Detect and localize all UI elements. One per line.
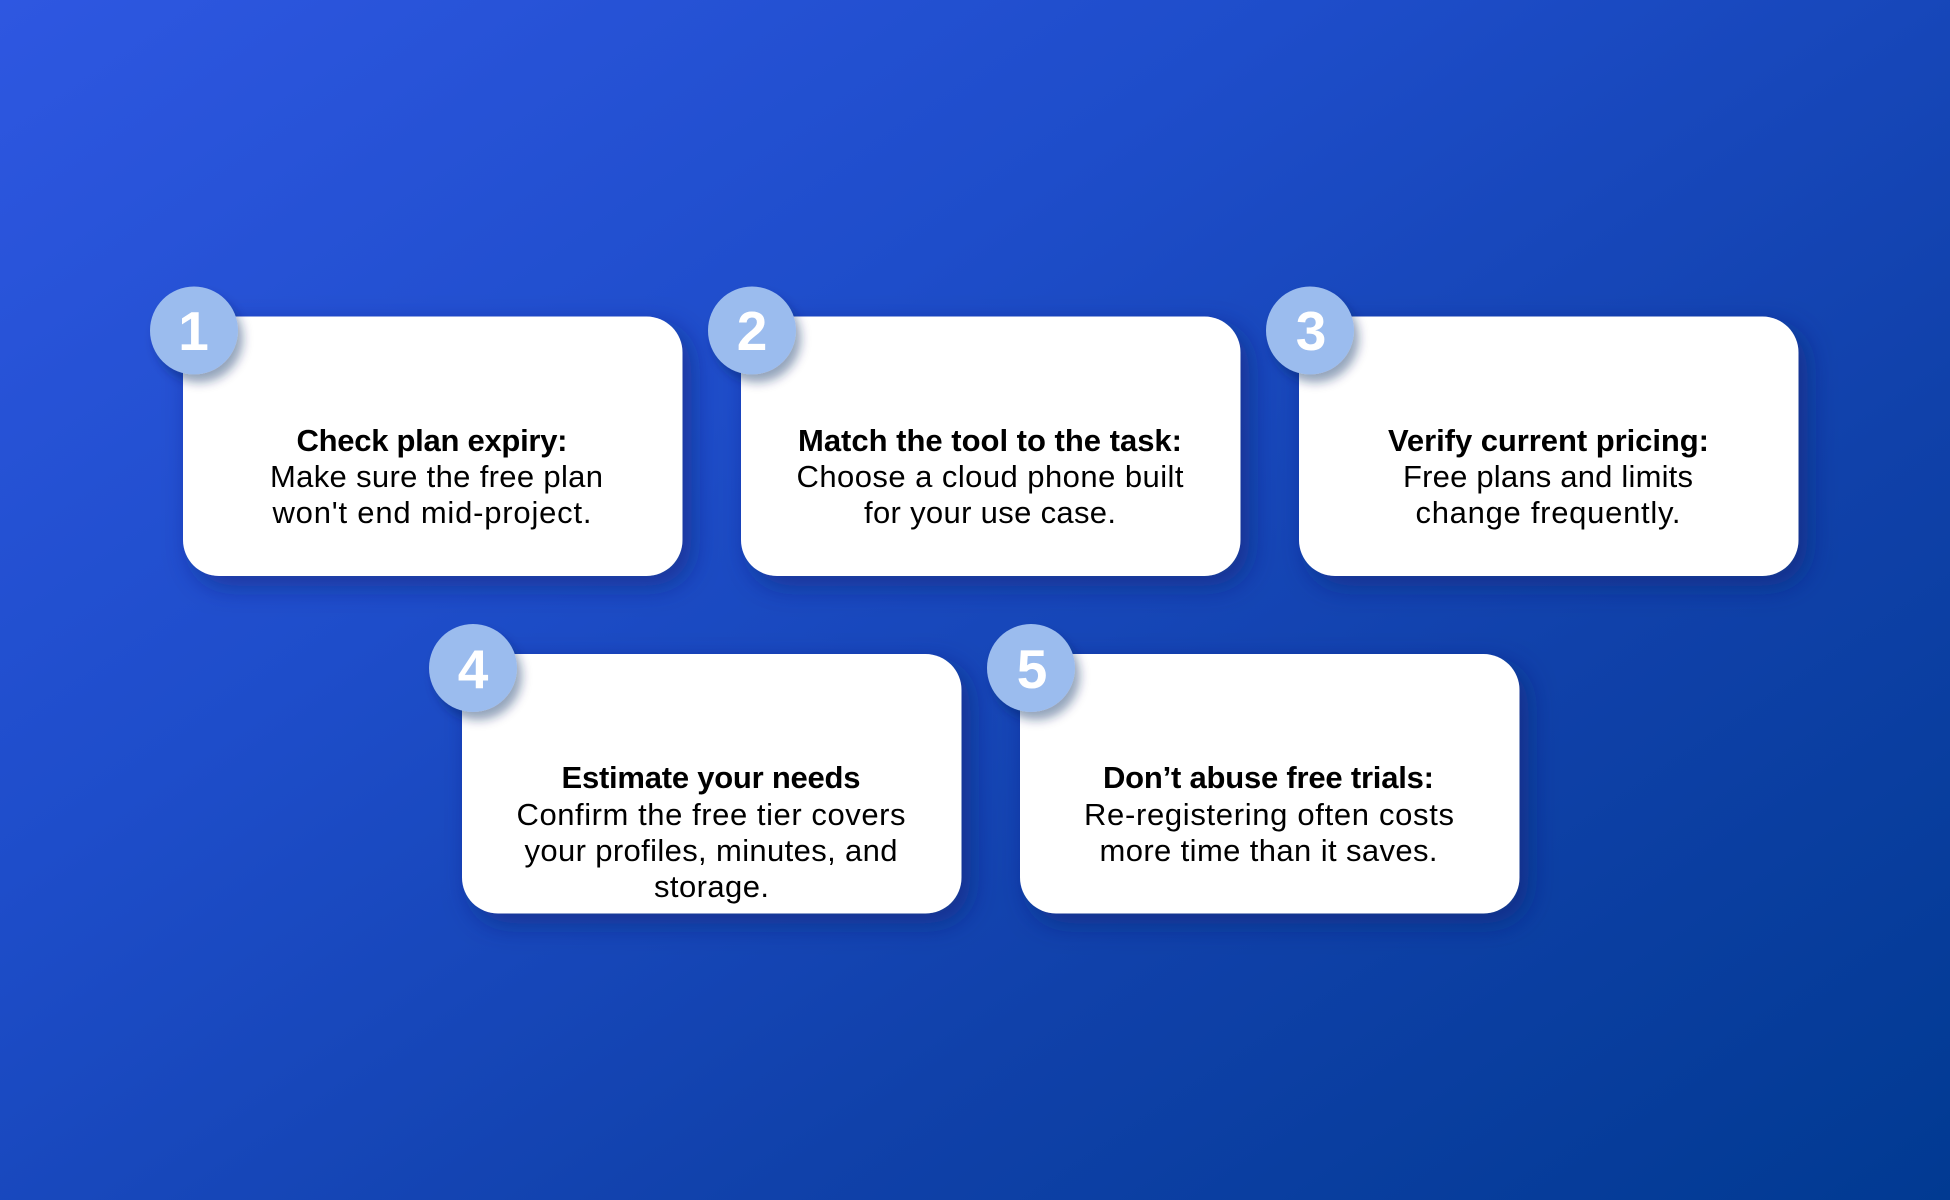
card 3 text: change frequently.: [1416, 495, 1680, 530]
number badge 3: [1266, 286, 1354, 374]
card 4 text: Confirm the free tier covers: [516, 797, 906, 832]
panel: card 2 match the tool: [708, 286, 1240, 576]
card 5 text: more time than it saves.: [1100, 833, 1438, 868]
card 5 text: Don’t abuse free trials:: [1103, 760, 1434, 795]
card 3 text: Free plans and limits: [1403, 459, 1693, 494]
card 4 text: your profiles, minutes, and: [524, 833, 898, 868]
card 5 text: [1084, 760, 1454, 868]
card 4 text: storage.: [654, 869, 769, 904]
card 5 background: [1020, 654, 1520, 914]
card 1 text: won't end mid-project.: [272, 495, 592, 530]
panel: card 5 free trials: [987, 624, 1520, 914]
card 2 text: Choose a cloud phone built: [796, 459, 1184, 494]
panel: card 3 verify pricing: [1266, 286, 1798, 576]
card 3 text: [1388, 423, 1709, 530]
number badge 5: 5: [1017, 638, 1047, 700]
card 5 text: Re-registering often costs: [1084, 797, 1454, 832]
card 1 text: Make sure the free plan: [270, 459, 603, 494]
card 1 text: [270, 423, 603, 530]
number badge 1: [150, 286, 238, 374]
number badge 3: 3: [1296, 300, 1326, 362]
card 2 text: [796, 423, 1184, 530]
number badge 4: [429, 624, 517, 712]
card 4 background: [462, 654, 962, 914]
panel: card 4 estimate your needs: [429, 624, 962, 914]
number badge 2: 2: [737, 300, 767, 362]
card 1 background: [183, 316, 682, 576]
card 4 text: [516, 760, 906, 904]
card 3 text: Verify current pricing:: [1388, 423, 1709, 458]
number badge 2: [708, 286, 796, 374]
number badge 4: 4: [458, 638, 489, 700]
number badge 5: [987, 624, 1075, 712]
panel: card 1 check plan expiry: [150, 286, 682, 576]
card 1 text: Check plan expiry:: [296, 423, 568, 458]
card 2 background: [741, 316, 1240, 576]
number badge 1: 1: [178, 300, 209, 362]
card 3 background: [1299, 316, 1798, 576]
card 2 text: Match the tool to the task:: [798, 423, 1182, 458]
card 4 text: Estimate your needs: [562, 760, 860, 795]
card 2 text: for your use case.: [864, 495, 1116, 530]
